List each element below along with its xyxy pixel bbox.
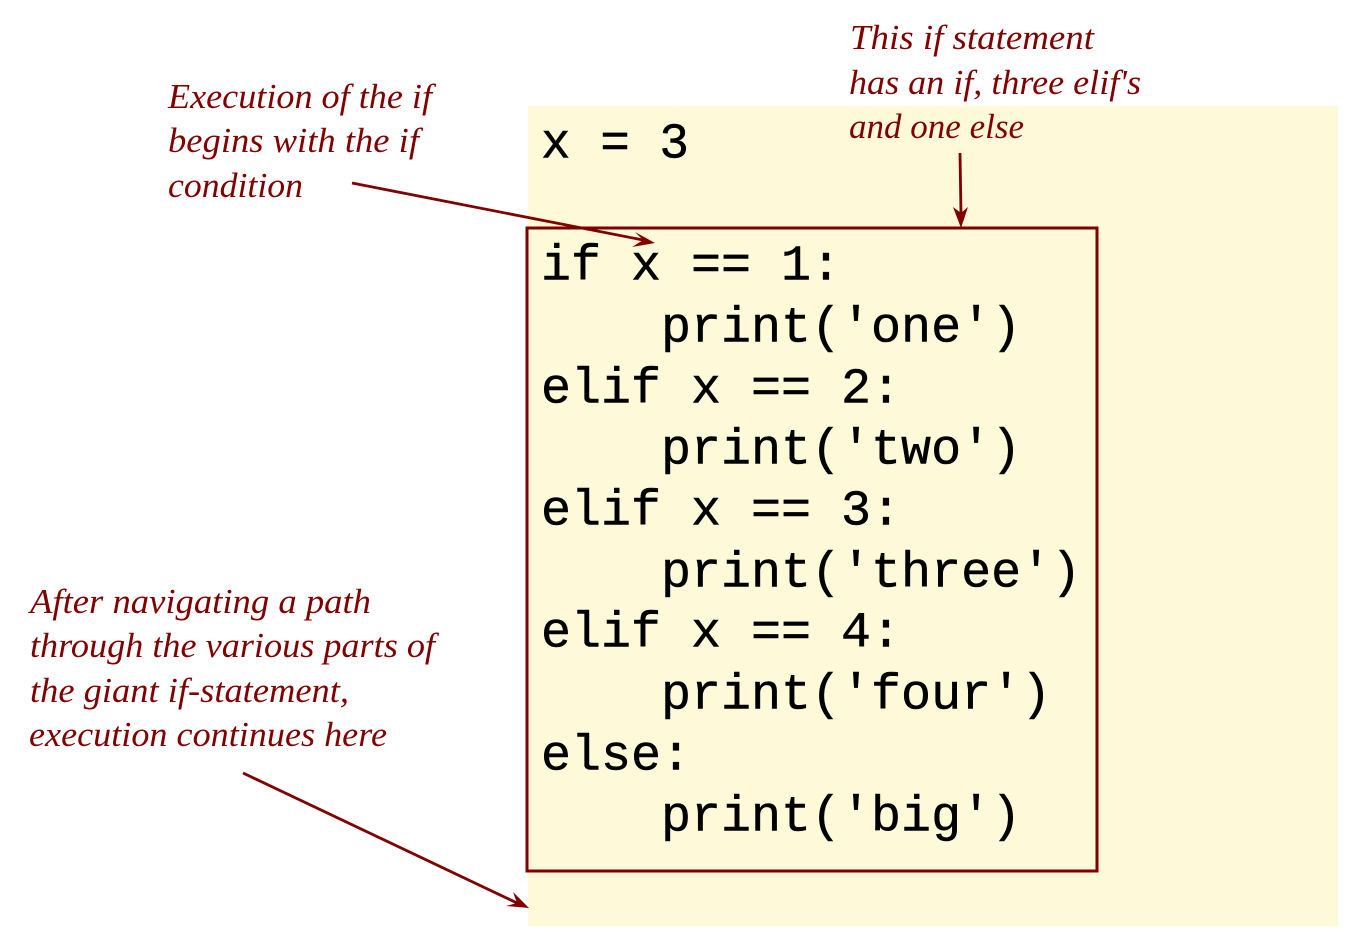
code: if statement: print('three') <box>541 546 1081 602</box>
code: if statement: print('two') <box>541 422 1021 480</box>
arrow: to after if statement <box>243 773 529 908</box>
code: assignment: x = 3 <box>541 116 689 174</box>
annotation: execution continues: After navigating a path <box>28 582 371 621</box>
code: if statement <box>541 238 1081 846</box>
annotation: execution begins: begins with the if <box>168 121 423 160</box>
code: if statement: else: <box>541 728 691 786</box>
arrow: to if condition <box>352 183 655 247</box>
annotation: if statement parts: This if statement <box>850 18 1095 57</box>
annotation: if statement parts: has an if, three elif's <box>849 63 1141 102</box>
annotation: if statement parts <box>849 18 1141 146</box>
annotation: execution continues: through the various parts of <box>30 626 439 665</box>
code: if statement: elif x == 4: <box>541 606 901 662</box>
annotation: execution continues: the giant if-statement, <box>30 671 349 710</box>
code: if statement: elif x == 3: <box>541 484 901 540</box>
panel: if statement box <box>527 228 1097 871</box>
code: if statement: print('big') <box>541 790 1021 846</box>
code: if statement: elif x == 2: <box>541 362 901 418</box>
annotation: execution begins: condition <box>168 166 303 205</box>
annotation: execution begins: Execution of the if <box>167 77 436 116</box>
annotation: execution continues: execution continues here <box>29 715 387 754</box>
panel: code background <box>528 106 1338 926</box>
code: if statement: print('one') <box>541 300 1021 358</box>
annotation: if statement parts: and one else <box>849 107 1024 146</box>
annotation: execution continues <box>28 582 439 754</box>
code: if statement: if x == 1: <box>541 238 841 296</box>
annotation: execution begins <box>167 77 436 205</box>
arrow: to if box <box>953 153 968 228</box>
code: if statement: print('four') <box>541 668 1051 724</box>
